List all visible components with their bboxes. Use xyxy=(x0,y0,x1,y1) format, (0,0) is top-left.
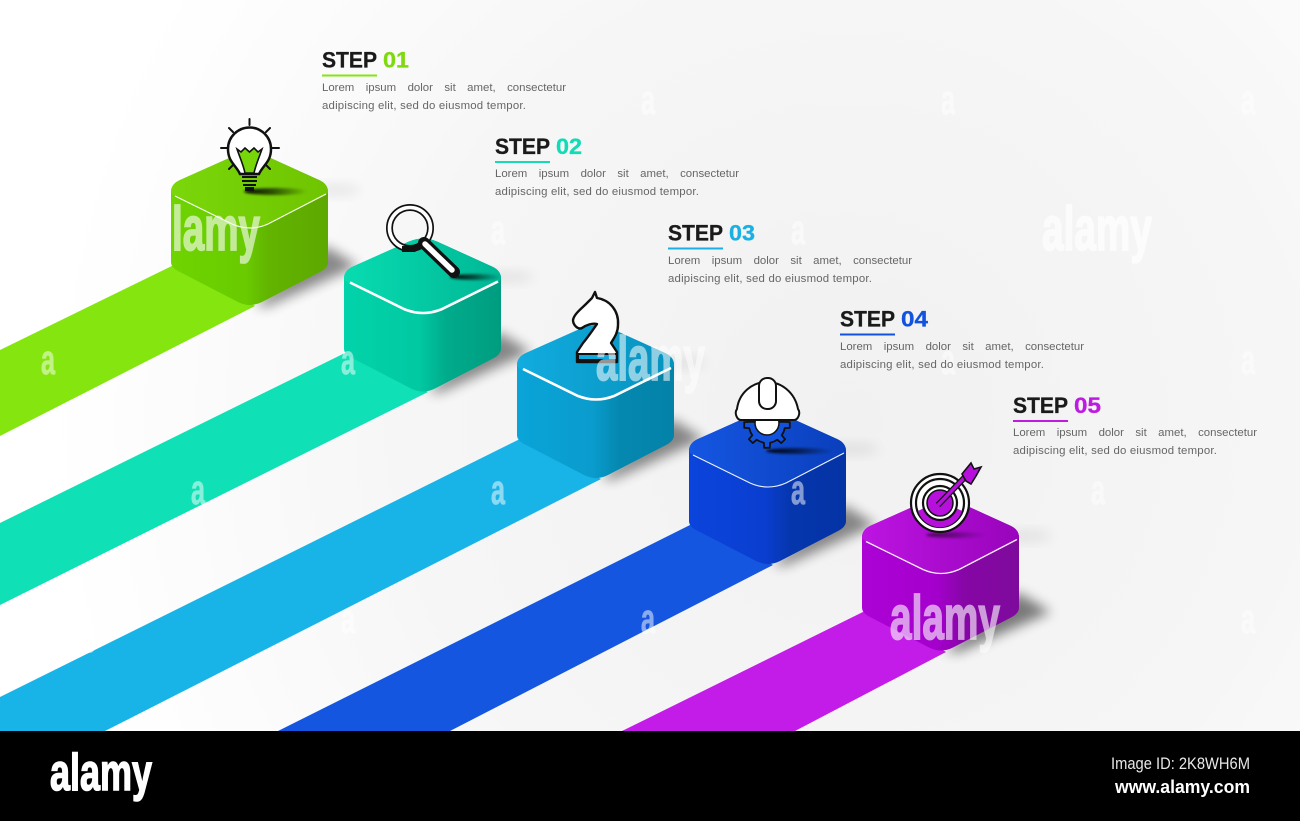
step 5 heading: STEP xyxy=(1013,393,1068,418)
ribbon 3 xyxy=(0,436,601,731)
step 4 heading xyxy=(840,306,929,336)
watermarks: a xyxy=(341,595,355,642)
step 4 text: adipiscing elit, sed do eiusmod tempor. xyxy=(840,359,1044,371)
icon: target with arrow xyxy=(911,463,986,538)
footer logo: alamy xyxy=(50,744,152,802)
step 3 text: adipiscing elit, sed do eiusmod tempor. xyxy=(668,273,872,285)
step 3 heading: 03 xyxy=(729,220,755,246)
ribbon 2 xyxy=(0,349,428,605)
step 1 heading: 01 xyxy=(383,48,409,72)
step 1 text xyxy=(322,82,566,112)
step 5 heading: 05 xyxy=(1074,393,1101,418)
icon: helmet with gear xyxy=(736,378,834,454)
watermarks: a xyxy=(191,466,205,513)
watermarks: a xyxy=(1241,76,1255,123)
step 3 heading xyxy=(668,220,755,250)
watermarks: alamy xyxy=(596,325,705,394)
watermarks xyxy=(0,76,1255,653)
step 2 text xyxy=(495,168,739,198)
step 2 heading: STEP xyxy=(495,134,550,159)
watermarks: a xyxy=(791,466,805,513)
step 3 heading: STEP xyxy=(668,220,723,246)
watermarks: a xyxy=(341,336,355,383)
watermarks: a xyxy=(1241,595,1255,642)
step 3 text: Lorem ipsum dolor sit amet, consectetur xyxy=(668,255,912,267)
icon: chess knight xyxy=(573,292,618,362)
box 1 xyxy=(171,152,328,305)
ribbon 1 xyxy=(0,262,255,436)
watermarks: a xyxy=(941,76,955,123)
icon: magnifying glass xyxy=(390,208,502,280)
box shadows xyxy=(255,184,1052,653)
watermarks: a xyxy=(641,76,655,123)
watermarks: a xyxy=(491,206,505,253)
watermarks: a xyxy=(491,466,505,513)
step 5 text: adipiscing elit, sed do eiusmod tempor. xyxy=(1013,445,1217,457)
watermarks: a xyxy=(1091,466,1105,513)
box 4 xyxy=(689,411,846,564)
watermarks: a xyxy=(791,206,805,253)
watermarks: a xyxy=(941,336,955,383)
step 1 heading xyxy=(322,48,409,76)
step 4 heading: 04 xyxy=(901,306,929,332)
watermarks: a xyxy=(641,595,655,642)
step 5 heading xyxy=(1013,393,1101,422)
ribbon 4 xyxy=(278,521,773,731)
step 2 text: Lorem ipsum dolor sit amet, consectetur xyxy=(495,168,739,180)
step 2 heading xyxy=(495,134,582,163)
watermarks: alamy xyxy=(890,584,1000,653)
step 2 heading: 02 xyxy=(556,134,582,159)
icon: light bulb xyxy=(221,119,308,195)
step 2 text: adipiscing elit, sed do eiusmod tempor. xyxy=(495,186,699,198)
step 4 text xyxy=(840,341,1084,371)
watermarks: alamy xyxy=(1042,195,1152,264)
image id: Image ID: 2K8WH6M xyxy=(1111,754,1250,773)
step 1 text: Lorem ipsum dolor sit amet, consectetur xyxy=(322,82,566,94)
step 3 text xyxy=(668,255,912,285)
step headings xyxy=(322,48,1101,422)
step 4 text: Lorem ipsum dolor sit amet, consectetur xyxy=(840,341,1084,353)
step 5 text xyxy=(1013,427,1257,457)
watermarks: lamy xyxy=(172,195,260,264)
step 4 heading: STEP xyxy=(840,306,895,332)
watermarks: a xyxy=(41,336,55,383)
step 1 heading: STEP xyxy=(322,48,377,72)
ribbon 5 xyxy=(622,608,946,731)
step 5 text: Lorem ipsum dolor sit amet, consectetur xyxy=(1013,427,1257,439)
website: www.alamy.com xyxy=(1114,777,1250,797)
step 1 text: adipiscing elit, sed do eiusmod tempor. xyxy=(322,100,526,112)
watermarks: alamy xyxy=(0,584,105,653)
box 3 xyxy=(517,325,674,478)
box 2 xyxy=(344,238,501,392)
box 5 xyxy=(862,498,1019,650)
footer bar xyxy=(0,731,1300,821)
watermarks: a xyxy=(1241,336,1255,383)
